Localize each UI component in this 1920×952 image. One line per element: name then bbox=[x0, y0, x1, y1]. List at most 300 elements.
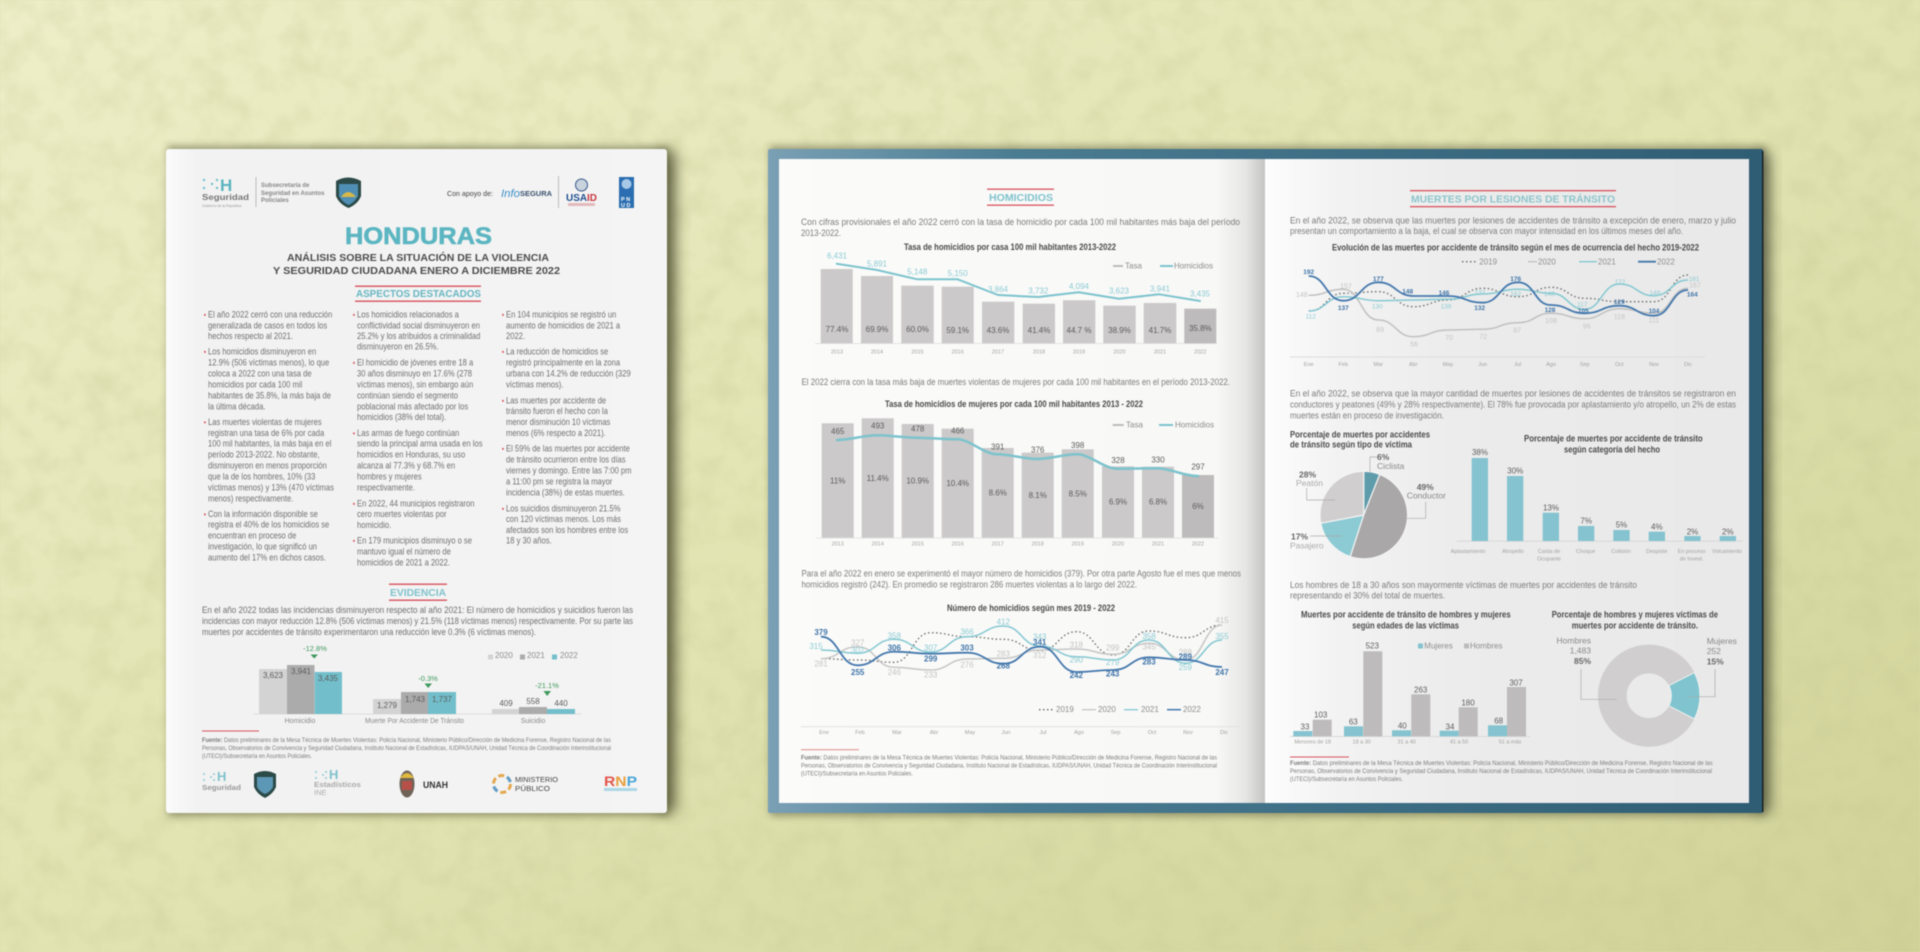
header logos: Gobierno de la República bbox=[202, 204, 242, 208]
chart: tasa de homicidios 2013-2022: Tasa de homicidios por casa 100 mil habitantes 2013-2022 bbox=[904, 242, 1116, 252]
header logos: Info bbox=[501, 188, 520, 200]
panel: muertes por lesiones de tránsito page bbox=[1265, 159, 1749, 803]
text block: highlights column 1: registran una tasa de 6% por cada bbox=[208, 427, 325, 438]
chart: tasa de homicidios de mujeres: 2021 bbox=[1152, 541, 1164, 547]
text block: intro tránsito: presentan un comportamiento a la baja, el cual se observa con mayor intensidad en los últimos meses del año. bbox=[1290, 226, 1683, 236]
panel: report cover sheet bbox=[166, 146, 676, 816]
text block: highlights column 1: período 2013-2022. No obstante, bbox=[208, 449, 320, 460]
text block: highlights column 3: 2022. bbox=[506, 330, 525, 341]
line chart: homicidios por mes 2019-2022: 279 bbox=[1106, 658, 1120, 667]
pie chart: tipo de víctima: Pasajero bbox=[1290, 540, 1324, 550]
chart: tasa de homicidios 2013-2022: 44.7 % bbox=[1067, 326, 1091, 335]
chart: tasa de homicidios 2013-2022: 6,431 bbox=[827, 251, 848, 260]
line chart: homicidios por mes 2019-2022: 358 bbox=[888, 631, 902, 640]
footer logos bbox=[202, 767, 637, 798]
text block: highlights column 1: 12.9% (506 víctimas menos), lo que bbox=[208, 357, 330, 368]
bar chart: edades de las víctimas: 33 bbox=[1301, 723, 1310, 732]
text block: highlights column 2: homicidio. bbox=[357, 519, 391, 530]
line chart: homicidios por mes 2019-2022: Jul bbox=[1039, 730, 1047, 736]
chart: tasa de homicidios 2013-2022: 3,435 bbox=[1190, 290, 1211, 299]
line chart: homicidios por mes 2019-2022: 255 bbox=[851, 668, 865, 677]
footer logos: PÚBLICO bbox=[515, 784, 550, 793]
bar chart: categoría del hecho: Despiste bbox=[1646, 549, 1667, 555]
text block: highlights column 1: • bbox=[204, 509, 207, 519]
chart: tasa de homicidios de mujeres: 493 bbox=[871, 421, 885, 430]
text block: highlights column 3: de tránsito ocurrieron entre los días bbox=[506, 454, 626, 465]
text block: highlights column 1: Los homicidios disminuyeron en bbox=[208, 346, 317, 357]
line chart: muertes de tránsito por mes: Feb bbox=[1339, 362, 1348, 368]
chart: tasa de homicidios 2013-2022: 41.7% bbox=[1149, 326, 1171, 335]
text block: highlights column 2: • bbox=[353, 358, 356, 368]
chart: tasa de homicidios de mujeres: 6.9% bbox=[1109, 498, 1127, 507]
chart: tasa de homicidios 2013-2022: 2017 bbox=[992, 349, 1004, 355]
bar chart: incidencias 2020-2022: -0.3% bbox=[418, 674, 438, 683]
line chart: muertes de tránsito por mes: 192 bbox=[1303, 269, 1315, 276]
chart: tasa de homicidios 2013-2022: 5,148 bbox=[907, 268, 928, 277]
text block: homicidios por mes: Para el año 2022 en enero se experimentó el mayor número de homicidios (379). Por otra parte Agosto fue el mes que menos bbox=[802, 569, 1241, 579]
chart: tasa de homicidios 2013-2022: 2013 bbox=[831, 349, 843, 355]
line chart: homicidios por mes 2019-2022: 315 bbox=[809, 642, 823, 651]
text block: highlights column 3: con 120 víctimas menos. Los más bbox=[506, 513, 621, 524]
text block: highlights column 3: • bbox=[502, 396, 505, 405]
text block: tipo de víctima bbox=[1290, 389, 1736, 420]
chart: tasa de homicidios de mujeres: 330 bbox=[1151, 456, 1165, 465]
bar chart: edades de las víctimas: 34 bbox=[1446, 722, 1455, 731]
line chart: homicidios por mes 2019-2022: 302 bbox=[851, 646, 865, 655]
line chart: homicidios por mes 2019-2022: 299 bbox=[1106, 644, 1120, 653]
text block: evidencia: En el año 2022 todas las incidencias disminuyeron respecto al año 2021: El número de homicidios y suicidios fueron las bbox=[202, 605, 633, 615]
donut chart: hombres y mujeres bbox=[1552, 609, 1737, 732]
text block: highlights column 3: registró principalmente en la zona bbox=[506, 357, 620, 368]
donut chart: hombres y mujeres: 1,483 bbox=[1570, 645, 1591, 655]
bar chart: categoría del hecho: Atropello bbox=[1502, 549, 1524, 555]
line chart: homicidios por mes 2019-2022: 259 bbox=[1179, 663, 1193, 672]
line chart: muertes de tránsito por mes: Nov bbox=[1649, 362, 1659, 368]
bar chart: edades de las víctimas: 41 a 50 bbox=[1450, 740, 1468, 746]
line chart: homicidios por mes 2019-2022: 283 bbox=[997, 649, 1011, 658]
line chart: homicidios por mes 2019-2022: 290 bbox=[1070, 655, 1084, 664]
chart: tasa de homicidios de mujeres: 2014 bbox=[872, 541, 884, 547]
heading: homicidios: HOMICIDIOS bbox=[989, 193, 1053, 204]
text block: highlights column 1: • bbox=[204, 347, 207, 357]
header logos: Subsecretaría de bbox=[261, 183, 310, 189]
line chart: homicidios por mes 2019-2022: 2021 bbox=[1141, 705, 1159, 714]
text block: highlights column 3: urbana con 14.2% de reducción (329 bbox=[506, 368, 631, 378]
bar chart: edades de las víctimas: 68 bbox=[1494, 717, 1504, 726]
line chart: muertes de tránsito por mes: 111 bbox=[1649, 318, 1659, 324]
donut chart: hombres y mujeres: 15% bbox=[1707, 657, 1724, 667]
bar chart: categoría del hecho: Ocupante bbox=[1537, 556, 1561, 562]
source note: homicidios: Fuente: Datos preliminares de la Mesa Técnica de Muertes Violentas: Policía Nacional, Ministerio Público/Dirección de Medicina Forense, Registro Nacional de las bbox=[801, 755, 1217, 761]
footer logos: Estadísticos bbox=[314, 780, 361, 789]
donut chart: hombres y mujeres: Hombres bbox=[1557, 635, 1591, 645]
line chart: homicidios por mes 2019-2022: 327 bbox=[851, 638, 865, 647]
chart: tasa de homicidios de mujeres: 8.5% bbox=[1069, 489, 1087, 498]
line chart: muertes de tránsito por mes: 2021 bbox=[1598, 257, 1616, 266]
text block: highlights column 1: • bbox=[204, 310, 207, 319]
chart: tasa de homicidios 2013-2022: 2021 bbox=[1154, 349, 1166, 355]
text block: highlights column 1: generalizada de casos en todos los bbox=[208, 320, 327, 330]
chart: tasa de homicidios 2013-2022: 2016 bbox=[952, 349, 964, 355]
pie chart: tipo de víctima: Conductor bbox=[1407, 490, 1446, 500]
chart: tasa de homicidios de mujeres: 2019 bbox=[1072, 541, 1084, 547]
chart: tasa de homicidios de mujeres: 11.4% bbox=[867, 474, 889, 483]
bar chart: categoría del hecho: 2% bbox=[1687, 527, 1698, 536]
text block: highlights column 2: homicidios (38% del total). bbox=[357, 411, 446, 422]
bar chart: categoría del hecho: 7% bbox=[1580, 517, 1592, 526]
bar chart: categoría del hecho: Aplastamiento bbox=[1451, 549, 1485, 555]
line chart: muertes de tránsito por mes: 137 bbox=[1338, 305, 1349, 312]
chart: tasa de homicidios 2013-2022: 5,150 bbox=[948, 269, 968, 278]
line chart: homicidios por mes 2019-2022: 289 bbox=[1179, 653, 1193, 662]
text block: intro homicidios bbox=[801, 217, 1240, 238]
text block: highlights column 3: • bbox=[502, 310, 505, 319]
source note: cover: Personas, Observatorios de Convivencia y Seguridad Ciudadana, Instituto Nacional de Estadísticas, IUDPAS/UNAH, Unidad Técnica de Coordinación Interinstitucional bbox=[202, 746, 611, 752]
bar chart: incidencias 2020-2022: -12.8% bbox=[303, 644, 327, 653]
header logos: U D bbox=[621, 203, 630, 209]
text block: evidencia: incidencias con mayor reducción 12.8% (506 víctimas menos) y 21.5% (118 víctimas menos) respectivamente. Por su parte las bbox=[202, 616, 633, 626]
donut chart: hombres y mujeres: Porcentaje de hombres y mujeres víctimas de bbox=[1552, 609, 1718, 619]
line chart: homicidios por mes 2019-2022: 233 bbox=[924, 671, 938, 680]
text block: highlights column 2: • bbox=[353, 499, 356, 508]
text block: highlights column 2: Las armas de fuego continúan bbox=[357, 427, 460, 438]
heading: aspectos destacados bbox=[355, 286, 481, 302]
text block: mujeres: El 2022 cierra con la tasa más baja de muertes violentas de mujeres por cada 100 mil habitantes en el período 2013-2022. bbox=[802, 377, 1230, 387]
text block: highlights column 3: menor disminución 10 víctimas bbox=[506, 416, 610, 427]
chart: tasa de homicidios de mujeres: 6.8% bbox=[1149, 498, 1167, 507]
text block: highlights column 3 bbox=[502, 309, 632, 546]
chart: tasa de homicidios de mujeres: 10.9% bbox=[906, 477, 929, 486]
line chart: muertes de tránsito por mes: 146 bbox=[1544, 291, 1555, 298]
bar chart: edades de las víctimas: 523 bbox=[1366, 641, 1380, 650]
line chart: homicidios por mes 2019-2022: 299 bbox=[924, 655, 938, 664]
pie chart: tipo de víctima: 49% bbox=[1417, 482, 1434, 492]
text block: highlights column 3: tránsito fueron el hecho con la bbox=[506, 405, 608, 416]
chart: tasa de homicidios de mujeres: 466 bbox=[951, 426, 965, 435]
bar chart: incidencias 2020-2022: 1,737 bbox=[432, 695, 453, 704]
chart: tasa de homicidios de mujeres: Homicidios bbox=[1175, 420, 1214, 429]
text block: highlights column 2: • bbox=[353, 310, 356, 319]
line chart: homicidios por mes 2019-2022: 307 bbox=[924, 643, 938, 652]
line chart: muertes de tránsito por mes: 105 bbox=[1578, 308, 1589, 315]
text block: highlights column 2: En 2022, 44 municipios registraron bbox=[357, 498, 475, 508]
line chart: muertes de tránsito por mes: 177 bbox=[1373, 276, 1384, 283]
chart: tasa de homicidios de mujeres: 2022 bbox=[1192, 541, 1204, 547]
pie chart: tipo de víctima bbox=[1290, 429, 1446, 559]
line chart: muertes de tránsito por mes: 2020 bbox=[1538, 257, 1556, 266]
heading: aspectos destacados: ASPECTOS DESTACADOS bbox=[356, 289, 481, 300]
line chart: muertes de tránsito por mes: 132 bbox=[1474, 305, 1486, 312]
subtitle bbox=[273, 251, 560, 277]
bar chart: categoría del hecho bbox=[1451, 434, 1743, 562]
chart: tasa de homicidios 2013-2022: 4,094 bbox=[1069, 282, 1090, 291]
line chart: homicidios por mes 2019-2022: Dic bbox=[1220, 730, 1228, 736]
bar chart: edades de las víctimas: 31 a 40 bbox=[1398, 740, 1416, 746]
line chart: homicidios por mes 2019-2022: Oct bbox=[1148, 730, 1157, 736]
bar chart: categoría del hecho: Choque bbox=[1576, 549, 1595, 555]
line chart: muertes de tránsito por mes: 181 bbox=[1689, 276, 1700, 283]
line chart: homicidios por mes 2019-2022: 283 bbox=[1142, 658, 1156, 667]
chart: tasa de homicidios 2013-2022: 3,623 bbox=[1109, 287, 1130, 296]
bar chart: categoría del hecho: 4% bbox=[1651, 523, 1663, 532]
chart: tasa de homicidios 2013-2022: 2014 bbox=[871, 349, 883, 355]
line chart: muertes de tránsito por mes: 96 bbox=[1583, 324, 1591, 330]
pie chart: tipo de víctima: de tránsito según tipo de víctima bbox=[1290, 440, 1413, 450]
bar chart: edades de las víctimas: Hombres bbox=[1470, 641, 1502, 650]
bar chart: incidencias 2020-2022: 3,941 bbox=[291, 667, 312, 676]
bar chart: edades de las víctimas: 51 a más bbox=[1499, 740, 1522, 746]
text block: highlights column 1: encuentran en proceso de bbox=[208, 530, 297, 541]
bar chart: incidencias 2020-2022: 409 bbox=[499, 699, 513, 708]
line chart: muertes de tránsito por mes: 164 bbox=[1687, 292, 1698, 298]
text block: highlights column 3: aumento de homicidios de 2021 a bbox=[506, 320, 620, 330]
source note: tránsito: Personas, Observatorios de Convivencia y Seguridad Ciudadana, Instituto Nacional de Estadísticas, IUDPAS/UNAH, Unidad Técnica de Coordinación Interinstitucional bbox=[1290, 769, 1712, 775]
chart: tasa de homicidios 2013-2022: 2019 bbox=[1073, 349, 1085, 355]
heading: evidencia: EVIDENCIA bbox=[390, 588, 446, 599]
bar chart: categoría del hecho: Caída de bbox=[1538, 549, 1560, 555]
header logos: Policiales bbox=[261, 198, 289, 204]
text block: highlights column 1: 100 mil habitantes, la más baja en el bbox=[208, 438, 332, 449]
heading: muertes por lesiones de tránsito: MUERTES POR LESIONES DE TRÁNSITO bbox=[1411, 192, 1615, 205]
line chart: muertes de tránsito por mes: 56 bbox=[1410, 342, 1418, 348]
line chart: homicidios por mes 2019-2022: 242 bbox=[1070, 671, 1084, 680]
chart: tasa de homicidios 2013-2022: Homicidios bbox=[1174, 262, 1213, 271]
line chart: homicidios por mes 2019-2022: 2020 bbox=[1098, 705, 1116, 714]
line chart: muertes de tránsito por mes: 157 bbox=[1340, 284, 1352, 290]
line chart: homicidios por mes 2019-2022: 412 bbox=[997, 618, 1011, 627]
line chart: muertes de tránsito por mes: 112 bbox=[1306, 314, 1316, 320]
line chart: homicidios por mes 2019-2022: 288 bbox=[1179, 648, 1193, 657]
bar chart: incidencias 2020-2022: 558 bbox=[526, 697, 540, 706]
line chart: muertes de tránsito por mes: 108 bbox=[1545, 318, 1557, 325]
donut chart: hombres y mujeres: 252 bbox=[1707, 646, 1721, 656]
bar chart: categoría del hecho: según categoría del hecho bbox=[1564, 445, 1660, 455]
text block: evidencia: muertes por accidentes de tránsito experimentaron una reducción leve 0.3% (6 víctimas menos). bbox=[202, 627, 536, 637]
chart: tasa de homicidios de mujeres: Tasa de homicidios de mujeres por cada 100 mil habitantes 2013 - 2022 bbox=[885, 399, 1143, 409]
chart: tasa de homicidios de mujeres: 2015 bbox=[912, 541, 924, 547]
line chart: homicidios por mes 2019-2022: 341 bbox=[1033, 638, 1047, 647]
text block: highlights column 3: La reducción de homicidios se bbox=[506, 346, 609, 357]
text block: highlights column 2: Los homicidios relacionados a bbox=[357, 309, 459, 319]
line chart: homicidios por mes 2019-2022: 379 bbox=[814, 628, 828, 637]
line chart: muertes de tránsito por mes: Ene bbox=[1304, 362, 1314, 368]
source note: cover bbox=[202, 730, 611, 760]
text block: tipo de víctima: En el año 2022, se observa que la mayor cantidad de muertes por lesiones de accidentes de tránsitos se registraron en bbox=[1290, 389, 1736, 399]
donut chart: hombres y mujeres: 85% bbox=[1574, 656, 1591, 666]
chart: tasa de homicidios 2013-2022: 5,891 bbox=[867, 260, 888, 269]
bar chart: incidencias 2020-2022: Suicidio bbox=[521, 718, 545, 725]
chart: tasa de homicidios de mujeres: 398 bbox=[1071, 441, 1085, 450]
chart: tasa de homicidios 2013-2022: 69.9% bbox=[866, 325, 888, 334]
bar chart: categoría del hecho: Porcentaje de muertes por accidente de tránsito bbox=[1524, 434, 1703, 444]
bar chart: edades de las víctimas: 40 bbox=[1398, 721, 1407, 730]
bar chart: categoría del hecho: 13% bbox=[1543, 503, 1559, 512]
bar chart: categoría del hecho: 38% bbox=[1472, 448, 1488, 457]
subtitle: Y SEGURIDAD CIUDADANA ENERO A DICIEMBRE 2022 bbox=[273, 266, 560, 277]
text block: highlights column 3: El 59% de las muertes por accidente bbox=[506, 443, 630, 454]
source note: tránsito: (UTECI)/Subsecretaría en Asuntos Policiales. bbox=[1290, 777, 1403, 783]
line chart: homicidios por mes 2019-2022: 312 bbox=[1033, 651, 1047, 660]
chart: tasa de homicidios 2013-2022: Tasa bbox=[1125, 262, 1142, 271]
text block: highlights column 2: cero muertes violentas por bbox=[357, 508, 447, 519]
bar chart: edades de las víctimas: 263 bbox=[1414, 685, 1428, 694]
source note: homicidios: (UTECI)/Subsecretaría en Asuntos Policiales. bbox=[801, 771, 913, 777]
text block: highlights column 2: disminuyeron en 26.5%. bbox=[357, 341, 439, 352]
title: HONDURAS bbox=[345, 223, 492, 250]
line chart: muertes de tránsito por mes: Evolución de las muertes por accidente de tránsito según el mes de ocurrencia del hecho 2019-2022 bbox=[1332, 242, 1699, 252]
line chart: muertes de tránsito por mes: 2019 bbox=[1479, 257, 1498, 266]
source note: cover: Fuente: Datos preliminares de la Mesa Técnica de Muertes Violentas: Policía Nacional, Ministerio Público/Dirección de Medicina Forense, Registro Nacional de las bbox=[202, 738, 611, 744]
bar chart: edades de las víctimas: 103 bbox=[1314, 710, 1328, 719]
text block: tipo de víctima: conductores y peatones (49% y 28% respectivamente). El 78% fue provocada por aplastamiento y/o atropello, un 2% de estas bbox=[1290, 399, 1736, 409]
text block: highlights column 2: homicidios en Honduras, su uso bbox=[357, 449, 466, 460]
header logos: Seguridad en Asuntos bbox=[261, 191, 325, 197]
chart: tasa de homicidios de mujeres: 8.1% bbox=[1029, 491, 1047, 500]
text block: highlights column 2: • bbox=[353, 536, 356, 546]
panel: open book bbox=[768, 146, 1770, 816]
text block: highlights column 2: En 179 municipios disminuyo o se bbox=[357, 535, 472, 546]
text block: highlights column 2: conflictividad social disminuyeron en bbox=[357, 320, 480, 330]
chart: tasa de homicidios 2013-2022: 3,941 bbox=[1150, 285, 1171, 294]
bar chart: categoría del hecho: 5% bbox=[1616, 520, 1627, 529]
line chart: muertes de tránsito por mes: 148 bbox=[1402, 288, 1414, 296]
text block: highlights column 1: menos) respectivamente. bbox=[208, 493, 293, 503]
text block: highlights column 2: El homicidio de jóvenes entre 18 a bbox=[357, 357, 474, 368]
header logos: SEGURA bbox=[520, 189, 553, 198]
line chart: muertes de tránsito por mes: 130 bbox=[1372, 304, 1383, 310]
line chart: muertes de tránsito por mes bbox=[1290, 242, 1705, 368]
chart: tasa de homicidios de mujeres: 2016 bbox=[952, 541, 964, 547]
line chart: muertes de tránsito por mes: 139 bbox=[1441, 304, 1452, 310]
source note: homicidios: Personas, Observatorios de Convivencia y Seguridad Ciudadana, Instituto Nacional de Estadísticas, IUDPAS/UNAH, Unidad Técnica de Coordinación Interinstitucional bbox=[801, 763, 1217, 769]
chart: tasa de homicidios 2013-2022: 41.4% bbox=[1028, 326, 1050, 335]
pie chart: tipo de víctima: 17% bbox=[1291, 531, 1308, 541]
header logos: P N bbox=[621, 197, 630, 203]
line chart: homicidios por mes 2019-2022: Sep bbox=[1111, 730, 1120, 736]
line chart: muertes de tránsito por mes: 104 bbox=[1649, 308, 1660, 315]
line chart: muertes de tránsito por mes: 117 bbox=[1577, 302, 1588, 308]
heading: homicidios bbox=[987, 188, 1054, 206]
line chart: muertes de tránsito por mes: 2022 bbox=[1657, 257, 1675, 266]
line chart: homicidios por mes 2019-2022: Jun bbox=[1002, 730, 1010, 736]
text block: hombres 18 a 30: Los hombres de 18 a 30 años son mayormente víctimas de muertes por accidentes de tránsito bbox=[1290, 580, 1637, 590]
line chart: homicidios por mes 2019-2022: 306 bbox=[888, 643, 902, 652]
text block: intro homicidios: Con cifras provisionales el año 2022 cerró con la tasa de homicidio por cada 100 mil habitantes más baja del período bbox=[801, 217, 1240, 227]
line chart: homicidios por mes 2019-2022: 343 bbox=[1033, 633, 1047, 642]
header logos: Con apoyo de: bbox=[447, 189, 493, 198]
footer logos: UNAH bbox=[423, 780, 448, 790]
line chart: homicidios por mes 2019-2022: 355 bbox=[1215, 632, 1229, 641]
text block: highlights column 2: • bbox=[353, 428, 356, 438]
line chart: muertes de tránsito por mes: 172 bbox=[1615, 279, 1626, 286]
footer logos: H bbox=[329, 767, 338, 782]
text block: highlights column 2 bbox=[353, 309, 483, 567]
text block: highlights column 1: El año 2022 cerró con una reducción bbox=[208, 309, 333, 319]
pie chart: tipo de víctima: Peatón bbox=[1296, 478, 1323, 488]
line chart: homicidios por mes 2019-2022: 345 bbox=[1142, 643, 1156, 652]
line chart: homicidios por mes 2019-2022: Feb bbox=[855, 730, 865, 736]
line chart: homicidios por mes 2019-2022 bbox=[801, 603, 1240, 736]
bar chart: incidencias 2020-2022: 1,279 bbox=[377, 701, 398, 710]
text block: highlights column 2: 25.2% y los atribuidos a criminalidad bbox=[357, 330, 481, 341]
line chart: muertes de tránsito por mes: 89 bbox=[1376, 327, 1384, 334]
text block: highlights column 2: hombres y mujeres bbox=[357, 471, 422, 481]
bar chart: incidencias 2020-2022: 3,435 bbox=[318, 674, 339, 683]
line chart: muertes de tránsito por mes: Ago bbox=[1546, 362, 1556, 368]
text block: tipo de víctima: muertes están en proceso de investigación. bbox=[1290, 410, 1444, 420]
panel: homicidios page bbox=[779, 159, 1265, 803]
source note: homicidios bbox=[801, 749, 1217, 777]
chart: tasa de homicidios de mujeres: Tasa bbox=[1126, 420, 1143, 429]
text block: highlights column 3: En 104 municipios se registró un bbox=[506, 309, 617, 319]
bar chart: incidencias 2020-2022: 2022 bbox=[560, 651, 578, 660]
bar chart: categoría del hecho: En proceso bbox=[1678, 549, 1706, 555]
subtitle: ANÁLISIS SOBRE LA SITUACIÓN DE LA VIOLENCIA bbox=[287, 251, 549, 264]
text block: highlights column 3: Los suicidios disminuyeron 21.5% bbox=[506, 503, 621, 513]
bar chart: edades de las víctimas: 180 bbox=[1461, 698, 1475, 707]
line chart: muertes de tránsito por mes: Mar bbox=[1374, 362, 1383, 368]
text block: highlights column 1: registra el 40% de los homicidios se bbox=[208, 519, 330, 530]
text block: highlights column 3: incidencia (38%) de estas muertes. bbox=[506, 487, 625, 497]
text block: intro tránsito bbox=[1290, 215, 1736, 236]
heading: evidencia bbox=[389, 584, 447, 601]
chart: tasa de homicidios de mujeres: 328 bbox=[1111, 456, 1125, 465]
text block: highlights column 3: • bbox=[502, 444, 505, 454]
chart: tasa de homicidios de mujeres: 391 bbox=[991, 443, 1005, 452]
text block: highlights column 2: 30 años disminuyo en 17.6% (278 bbox=[357, 368, 472, 378]
text block: evidencia bbox=[202, 605, 633, 637]
text block: highlights column 1: Con la información disponible se bbox=[208, 508, 318, 519]
line chart: muertes de tránsito por mes: 72 bbox=[1479, 334, 1487, 341]
text block: highlights column 1: aumento del 17% en dichos casos. bbox=[208, 552, 326, 563]
bar chart: incidencias 2020-2022: Homicidio bbox=[285, 718, 315, 725]
bar chart: incidencias 2020-2022: 2021 bbox=[527, 651, 545, 660]
chart: tasa de homicidios 2013-2022: 59.1% bbox=[946, 326, 969, 335]
pie chart: tipo de víctima: Ciclista bbox=[1377, 461, 1405, 471]
line chart: homicidios por mes 2019-2022: Número de homicidios según mes 2019 - 2022 bbox=[947, 603, 1115, 613]
text block: highlights column 2: mantuvo igual el número de bbox=[357, 546, 451, 557]
text block: highlights column 3: viernes y domingo. Entre las 7:00 pm bbox=[506, 465, 632, 476]
footer logos: Seguridad bbox=[202, 783, 241, 792]
bar chart: edades de las víctimas: 307 bbox=[1509, 678, 1523, 687]
text block: highlights column 2: alcanza al 77.3% y 68.7% en bbox=[357, 460, 455, 471]
chart: tasa de homicidios de mujeres: 8.6% bbox=[989, 488, 1007, 497]
text block: highlights column 1: homicidios por cada 100 mil bbox=[208, 379, 302, 389]
line chart: muertes de tránsito por mes: Abr bbox=[1409, 362, 1418, 368]
text block: intro tránsito: En el año 2022, se observa que las muertes por lesiones de accidentes de tránsito a excepción de enero, marzo y julio bbox=[1290, 215, 1736, 225]
line chart: muertes de tránsito por mes: 87 bbox=[1513, 328, 1521, 334]
line chart: muertes de tránsito por mes: May bbox=[1443, 362, 1453, 368]
text block: highlights column 1: Las muertes violentas de mujeres bbox=[208, 416, 322, 427]
pie chart: tipo de víctima: 28% bbox=[1299, 469, 1316, 479]
line chart: homicidios por mes 2019-2022: 2019 bbox=[1056, 705, 1074, 714]
source note: tránsito bbox=[1290, 756, 1713, 783]
chart: tasa de homicidios 2013-2022: 3,732 bbox=[1028, 287, 1049, 296]
text block: highlights column 1: habitantes de 35.8%, la más baja de bbox=[208, 390, 331, 400]
line chart: homicidios por mes 2019-2022: 2022 bbox=[1183, 705, 1201, 714]
line chart: muertes de tránsito por mes: 70 bbox=[1445, 335, 1453, 342]
bar chart: incidencias 2020-2022: -21.1% bbox=[535, 681, 559, 690]
line chart: muertes de tránsito por mes: 167 bbox=[1689, 282, 1701, 290]
line chart: muertes de tránsito por mes: 148 bbox=[1296, 292, 1308, 299]
chart: tasa de homicidios de mujeres: 2018 bbox=[1032, 541, 1044, 547]
chart: tasa de homicidios de mujeres: 478 bbox=[911, 424, 925, 433]
header logos: H bbox=[220, 176, 232, 195]
text block: homicidios por mes bbox=[802, 569, 1241, 589]
line chart: muertes de tránsito por mes: Sep bbox=[1580, 362, 1590, 368]
line chart: muertes de tránsito por mes: 146 bbox=[1439, 290, 1450, 297]
text block: highlights column 1: que la de los hombres, 10% (33 bbox=[208, 471, 316, 481]
